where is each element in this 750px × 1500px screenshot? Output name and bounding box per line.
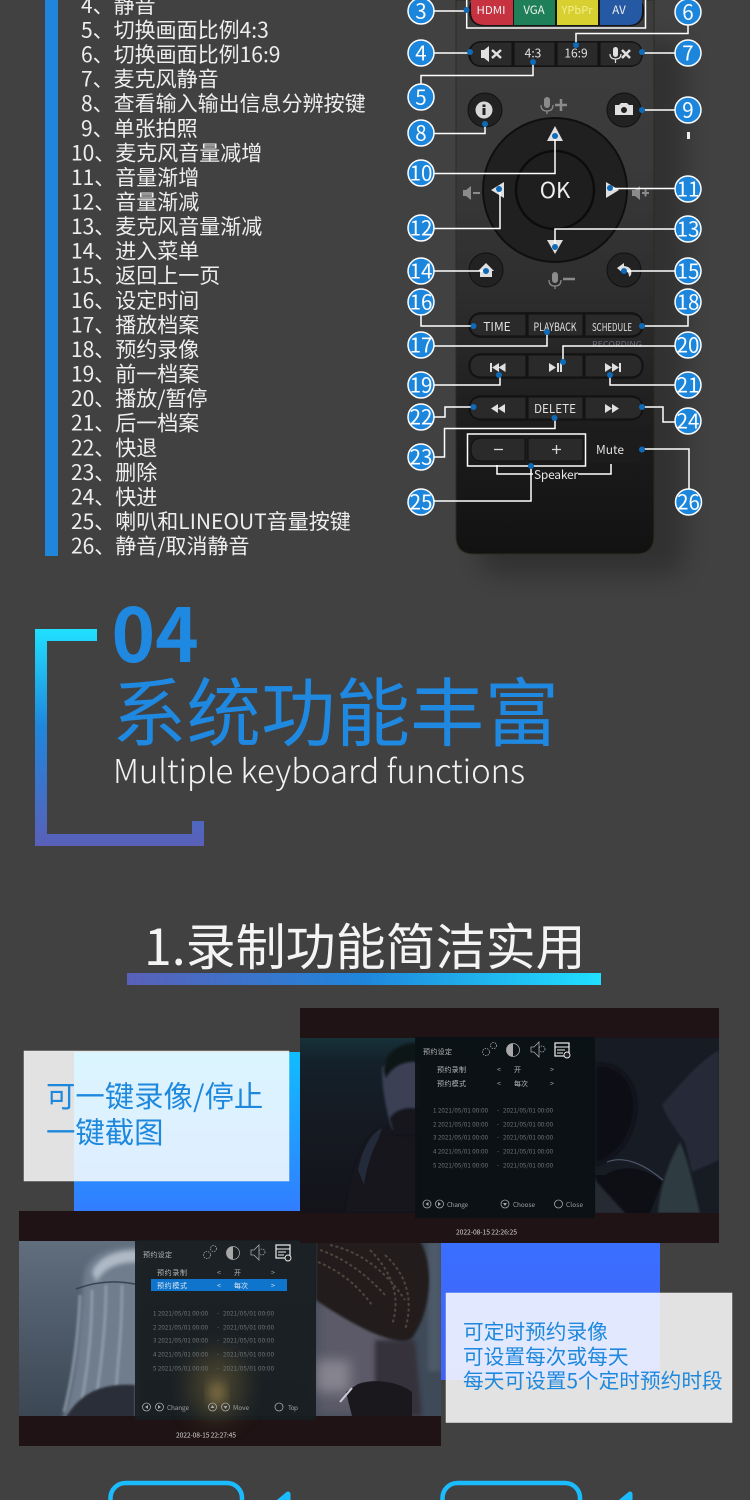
speaker volume and mute buttons — [468, 434, 644, 483]
text block: button function list: 19、前一档案 — [71, 359, 199, 389]
callout 18 — [639, 286, 701, 329]
dark scene with man — [300, 1038, 719, 1213]
overlay menu panel: - — [217, 1364, 219, 1372]
colour input buttons — [467, 0, 646, 28]
overlay menu panel: 1 2021/05/01 00:00 — [153, 1308, 209, 1318]
text block: button function list: 9、单张拍照 — [81, 113, 198, 143]
printed mic and volume icons — [463, 97, 649, 289]
callout 5 — [408, 59, 536, 110]
right woman background — [316, 1243, 441, 1366]
overlay menu panel: 2021/05/01 00:00 — [503, 1146, 554, 1156]
text block: button function list: 5、切换画面比例4:3 — [81, 14, 269, 44]
callout 16: 16 — [410, 286, 432, 316]
right side figures — [595, 1038, 719, 1213]
overlay menu panel: 开 — [234, 1268, 241, 1278]
text block: button function list: 13、麦克风音量渐减 — [71, 211, 262, 241]
callout 11 — [607, 172, 701, 202]
screenshot: schedule menu move mode: 2022-08-15 22:27:45 — [176, 1430, 236, 1440]
callout 15 — [621, 254, 701, 284]
back button — [607, 253, 641, 287]
overlay menu panel: 预约设定 — [423, 1047, 452, 1057]
text block: button function list: 26、静音/取消静音 — [71, 531, 250, 561]
mute and aspect ratio buttons — [468, 41, 643, 67]
callout 7 — [639, 36, 701, 66]
overlay menu panel: 2021/05/01 00:00 — [223, 1322, 275, 1332]
next section outline box right — [442, 1483, 580, 1500]
section subtitle: Multiple keyboard functions — [113, 745, 525, 793]
time playback schedule buttons: PLAYBACK — [534, 319, 577, 335]
time playback schedule buttons — [468, 312, 644, 350]
blue block behind first caption — [74, 1052, 300, 1211]
callout 12: 12 — [410, 212, 432, 242]
text block: button function list: 22、快退 — [71, 432, 157, 462]
next section outline box left — [110, 1483, 242, 1500]
caption: one-key record and screenshot — [24, 1051, 289, 1181]
callout 10 — [408, 133, 558, 186]
callout 22: 22 — [410, 400, 432, 430]
time playback schedule buttons: RECORDING — [592, 339, 642, 350]
caption: one-key record and screenshot: 一键截图 — [46, 1110, 164, 1152]
speaker volume and mute buttons: Mute — [596, 441, 624, 458]
overlay menu panel: > — [271, 1281, 275, 1291]
text block: button function list: 11、音量渐增 — [71, 162, 199, 192]
overlay menu panel: 2021/05/01 00:00 — [503, 1160, 554, 1170]
bracket frame — [35, 629, 204, 846]
callout 5: 5 — [415, 80, 427, 110]
overlay menu panel: < — [217, 1268, 221, 1278]
screenshot: schedule menu move mode — [19, 1211, 441, 1446]
callout 26: 26 — [677, 486, 700, 516]
overlay menu panel: < — [497, 1079, 501, 1089]
overlay menu panel: - — [497, 1106, 499, 1114]
overlay menu panel — [415, 1037, 595, 1218]
overlay menu panel: - — [497, 1132, 499, 1142]
callout 4: 4 — [415, 36, 427, 66]
text block: button function list: 20、播放/暂停 — [71, 383, 208, 413]
info button — [468, 93, 502, 127]
callout 23: 23 — [410, 440, 432, 470]
overlay menu panel: 2 2021/05/01 00:00 — [153, 1322, 209, 1332]
direction pad: OK — [540, 173, 571, 205]
overlay menu panel: - — [497, 1146, 499, 1156]
callout 6 — [573, 0, 701, 48]
text block: button function list: 12、音量渐减 — [71, 186, 199, 216]
overlay menu panel: 预约模式 — [157, 1281, 187, 1291]
overlay menu panel: 2021/05/01 00:00 — [503, 1132, 554, 1142]
direction pad — [483, 118, 627, 262]
overlay menu panel: - — [497, 1120, 499, 1128]
caption: scheduled recording: 可设置每次或每天 — [463, 1340, 629, 1370]
text block: button function list: 21、后一档案 — [71, 408, 199, 438]
speaker volume and mute buttons: Speaker — [534, 466, 578, 483]
overlay menu panel: 开 — [514, 1065, 521, 1075]
text block: button function list: 10、麦克风音量减增 — [71, 137, 262, 167]
feature heading: 1.录制功能简洁实用 — [144, 908, 586, 980]
callout 18: 18 — [677, 286, 699, 316]
colour input buttons: YPbPr — [560, 2, 593, 18]
callout 19 — [408, 368, 502, 398]
callout 11: 11 — [677, 172, 699, 202]
rewind delete forward buttons: DELETE — [534, 400, 576, 417]
text block: button function list: 25、喇叭和LINEOUT音量按键 — [71, 506, 351, 536]
man jacket — [370, 1132, 373, 1134]
callout 3 — [408, 0, 470, 24]
callout 8 — [408, 116, 488, 146]
overlay menu panel: 4 2021/05/01 00:00 — [433, 1146, 489, 1156]
section header — [35, 577, 559, 846]
rewind delete forward buttons — [468, 395, 644, 421]
overlay menu panel: Change — [167, 1403, 189, 1412]
overlay menu panel: Top — [288, 1403, 298, 1412]
overlay menu panel: 5 2021/05/01 00:00 — [433, 1160, 489, 1170]
overlay menu panel: 预约录制 — [157, 1268, 187, 1278]
time playback schedule buttons: SCHEDULE — [592, 320, 632, 335]
text block: button function list: 7、麦克风静音 — [81, 64, 219, 94]
text block: button function list: 18、预约录像 — [71, 334, 199, 364]
screenshot: schedule menu change mode — [300, 1008, 719, 1243]
text block: button function list: 6、切换画面比例16:9 — [81, 39, 280, 69]
text block: button function list — [71, 0, 366, 561]
overlay menu panel: 预约录制 — [437, 1065, 466, 1075]
callout 15: 15 — [677, 254, 699, 284]
colour input buttons: HDMI — [476, 2, 506, 18]
callout 17 — [408, 328, 550, 358]
remote control — [456, 0, 685, 575]
overlay menu panel: 预约模式 — [437, 1079, 466, 1089]
heading underline — [127, 973, 601, 985]
callout 9: 9 — [682, 94, 694, 124]
overlay menu panel: 4 2021/05/01 00:00 — [153, 1350, 209, 1358]
overlay menu panel: 1 2021/05/01 00:00 — [433, 1106, 489, 1114]
overlay menu panel: - — [217, 1308, 219, 1318]
text block: button function list: 23、删除 — [71, 457, 157, 487]
text block: button function list: 17、播放档案 — [71, 309, 199, 339]
overlay menu panel: 2021/05/01 00:00 — [223, 1308, 275, 1318]
callout 21 — [607, 368, 701, 398]
man face — [381, 1061, 415, 1130]
overlay menu panel: Close — [566, 1200, 583, 1209]
callout 8: 8 — [415, 116, 427, 146]
overlay menu panel: 每次 — [514, 1079, 528, 1089]
callout 13: 13 — [677, 212, 699, 242]
text block: button function list: 16、设定时间 — [71, 285, 199, 315]
section title: 系统功能丰富 — [112, 655, 559, 762]
accent bar beside list — [45, 0, 58, 556]
overlay menu panel: - — [497, 1160, 499, 1170]
callout 25: 25 — [410, 486, 432, 516]
mute and aspect ratio buttons: 4:3 — [525, 44, 541, 62]
overlay menu panel: Choose — [513, 1200, 535, 1209]
colour input buttons: AV — [612, 2, 626, 18]
remote shadow — [480, 40, 685, 575]
overlay menu panel: 预约设定 — [143, 1250, 172, 1260]
callout 4 — [408, 36, 473, 66]
overlay menu panel: Change — [447, 1200, 468, 1209]
overlay menu panel — [135, 1240, 316, 1420]
next section arrow right — [618, 1494, 630, 1500]
section number: 04 — [112, 577, 199, 684]
overlay menu panel: - — [217, 1350, 219, 1358]
time playback schedule buttons: TIME — [483, 318, 511, 335]
colour input buttons: VGA — [523, 2, 545, 18]
skip and play buttons — [468, 353, 644, 379]
callout 10: 10 — [410, 156, 432, 186]
next section arrow left — [276, 1494, 288, 1500]
scene with two women — [19, 1241, 441, 1420]
callout 16 — [408, 286, 476, 329]
overlay menu panel: 2021/05/01 00:00 — [503, 1120, 554, 1128]
callout 22 — [408, 400, 476, 430]
overlay menu panel: > — [550, 1079, 554, 1089]
callout 19: 19 — [410, 368, 432, 398]
mute and aspect ratio buttons: 16:9 — [564, 44, 588, 62]
text block: button function list: 8、查看输入输出信息分辨按键 — [81, 88, 366, 118]
callout 23 — [408, 415, 558, 470]
overlay menu panel: > — [271, 1268, 275, 1278]
caption: scheduled recording — [446, 1293, 732, 1422]
remote body — [456, 0, 654, 554]
callout 13 — [552, 212, 701, 250]
screenshot: schedule menu change mode: 2022-08-15 22:26:25 — [456, 1226, 517, 1236]
overlay menu panel: - — [217, 1336, 219, 1344]
callout 24 — [639, 404, 701, 434]
stray tick mark — [687, 132, 690, 139]
callout 25 — [408, 463, 534, 516]
overlay menu panel: 2021/05/01 00:00 — [223, 1364, 275, 1372]
text block: button function list: 14、进入菜单 — [71, 236, 199, 266]
overlay menu panel: 2 2021/05/01 00:00 — [433, 1120, 489, 1128]
callout 21: 21 — [677, 368, 699, 398]
overlay menu panel: 2021/05/01 00:00 — [223, 1350, 275, 1358]
callout 14 — [408, 254, 489, 284]
callout 9 — [639, 94, 701, 124]
caption: one-key record and screenshot: 可一键录像/停止 — [46, 1074, 263, 1116]
overlay menu panel: 2021/05/01 00:00 — [223, 1336, 275, 1344]
overlay menu panel: 3 2021/05/01 00:00 — [433, 1132, 489, 1142]
callout 20 — [560, 328, 701, 365]
overlay menu panel: 2021/05/01 00:00 — [503, 1106, 554, 1114]
overlay menu panel: - — [217, 1322, 219, 1332]
callout 17: 17 — [410, 328, 432, 358]
caption: scheduled recording: 可定时预约录像 — [463, 1315, 608, 1345]
overlay menu panel: < — [497, 1065, 501, 1075]
home button — [469, 253, 503, 287]
camera button — [607, 93, 641, 127]
callout 24: 24 — [677, 404, 699, 434]
callout 12 — [408, 186, 502, 242]
overlay menu panel: < — [217, 1281, 221, 1291]
callout 14: 14 — [410, 254, 432, 284]
blue block behind second caption — [441, 1243, 660, 1380]
text block: button function list: 24、快进 — [71, 482, 157, 512]
overlay menu panel: > — [550, 1065, 554, 1075]
callout 7: 7 — [682, 36, 694, 66]
overlay menu panel: Move — [233, 1403, 249, 1412]
callout 20: 20 — [677, 328, 699, 358]
caption: scheduled recording: 每天可设置5个定时预约时段 — [463, 1364, 723, 1394]
overlay menu panel: 每次 — [234, 1281, 248, 1291]
callout 26 — [639, 446, 702, 516]
overlay menu panel: 5 2021/05/01 00:00 — [153, 1364, 209, 1372]
overlay menu panel: 3 2021/05/01 00:00 — [153, 1336, 209, 1344]
text block: button function list: 15、返回上一页 — [71, 260, 220, 290]
